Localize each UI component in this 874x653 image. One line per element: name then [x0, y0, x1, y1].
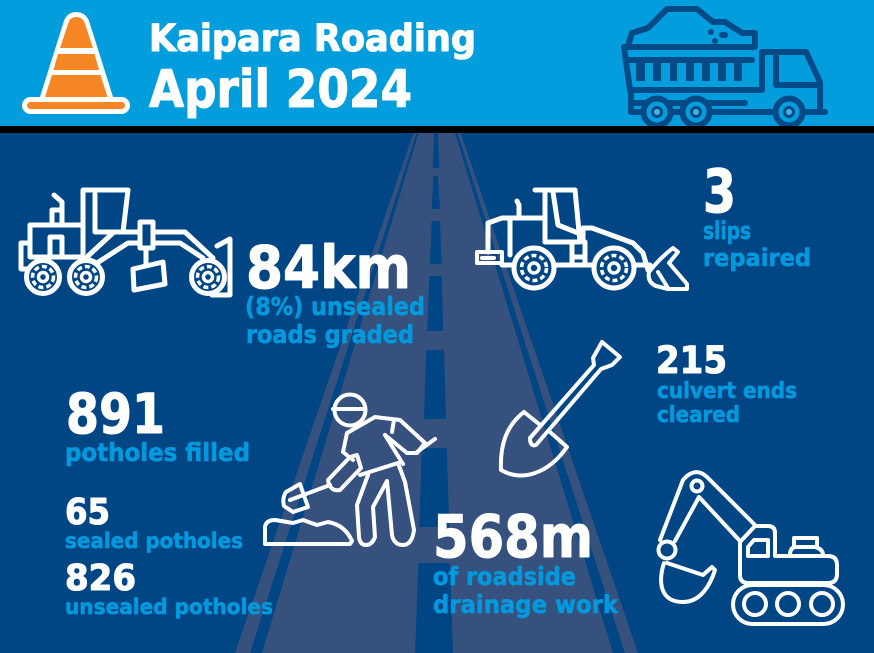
- stat: 826 unsealed potholes: 826: [65, 558, 136, 599]
- stat: 568m drainage: 568m: [433, 502, 593, 571]
- stat: 215 culvert ends: [656, 339, 797, 428]
- stat: 3 slips repaired: 3: [703, 157, 736, 227]
- stat: 3 slips repaired: repaired: [703, 244, 811, 272]
- stat: 215 culvert ends: 215: [656, 339, 727, 382]
- stat: 891 potholes filled: 891: [66, 382, 165, 446]
- stat: 891 potholes filled: [65, 382, 250, 467]
- stat: 84km graded: [245, 233, 425, 349]
- stat: 84km graded: 84km: [246, 233, 411, 302]
- stat: 3 slips repaired: [703, 157, 811, 272]
- icon: shovel: [501, 342, 620, 475]
- stat: 826 unsealed potholes: unsealed potholes: [65, 595, 273, 619]
- stat: 568m drainage: drainage work: [433, 590, 619, 619]
- stat: 3 slips repaired: slips: [703, 217, 751, 245]
- icon: excavator: [658, 472, 843, 624]
- stat: 215 culvert ends: cleared: [657, 403, 740, 428]
- stat: 568m drainage: [433, 502, 619, 619]
- stat: 65 sealed potholes: sealed potholes: [65, 529, 243, 553]
- header band: [0, 0, 874, 133]
- icon: front loader: [477, 190, 687, 289]
- stat: 568m drainage: of roadside: [433, 562, 576, 591]
- title: [149, 17, 476, 120]
- road: [235, 133, 638, 653]
- stat: 826 unsealed potholes: [65, 558, 273, 619]
- icon: road grader: [21, 190, 230, 295]
- icon: dump truck: [600, 9, 874, 133]
- stat: 891 potholes filled: potholes filled: [65, 438, 250, 467]
- stat: 65 sealed potholes: [65, 492, 243, 553]
- stat: 84km graded: (8%) unsealed: [245, 292, 425, 321]
- title: Kaipara Roading: [149, 17, 476, 60]
- stat: 65 sealed potholes: 65: [65, 492, 110, 533]
- icon: traffic cone: [22, 12, 130, 114]
- stat: 84km graded: roads graded: [246, 320, 414, 349]
- title: April 2024: [149, 60, 412, 120]
- stat: 215 culvert ends: culvert ends: [657, 379, 797, 404]
- icon: road worker digging: [265, 394, 435, 545]
